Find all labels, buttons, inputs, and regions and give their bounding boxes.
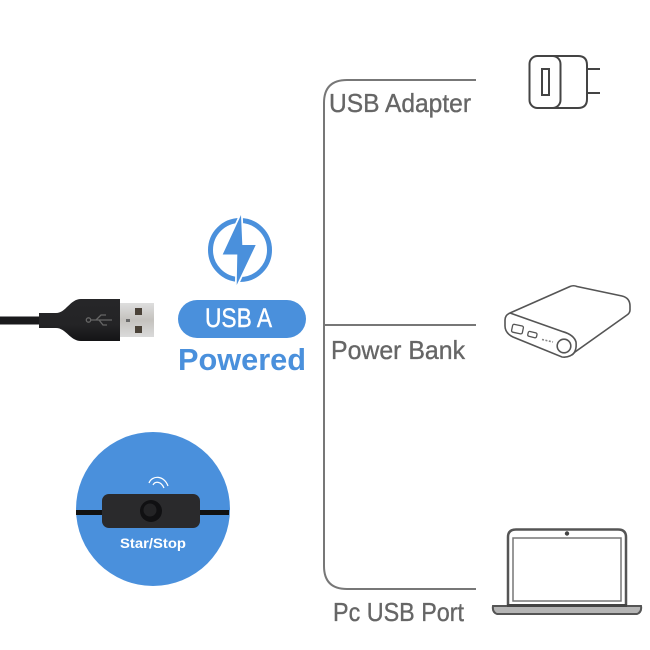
label: USB Adapter: USB Adapter: [329, 88, 471, 118]
USB plug photo: [0, 299, 154, 341]
USB A pill badge: [178, 300, 306, 338]
icon: USB wall adapter: [530, 56, 600, 108]
USB A pill badge: USB A: [205, 303, 272, 333]
inline switch: [102, 494, 200, 528]
icon: lightning bolt in circle: [210, 215, 270, 285]
switch circle panel: [76, 432, 230, 586]
label: Pc USB Port: Pc USB Port: [333, 597, 465, 627]
heading: Powered: Powered: [178, 342, 306, 377]
icon: laptop: [493, 530, 641, 614]
bracket connector lines: [324, 80, 476, 589]
label: Power Bank: Power Bank: [331, 335, 466, 365]
label: Star/Stop: Star/Stop: [120, 535, 186, 551]
icon: power bank: [505, 286, 630, 357]
icon: press arcs: [149, 477, 168, 488]
